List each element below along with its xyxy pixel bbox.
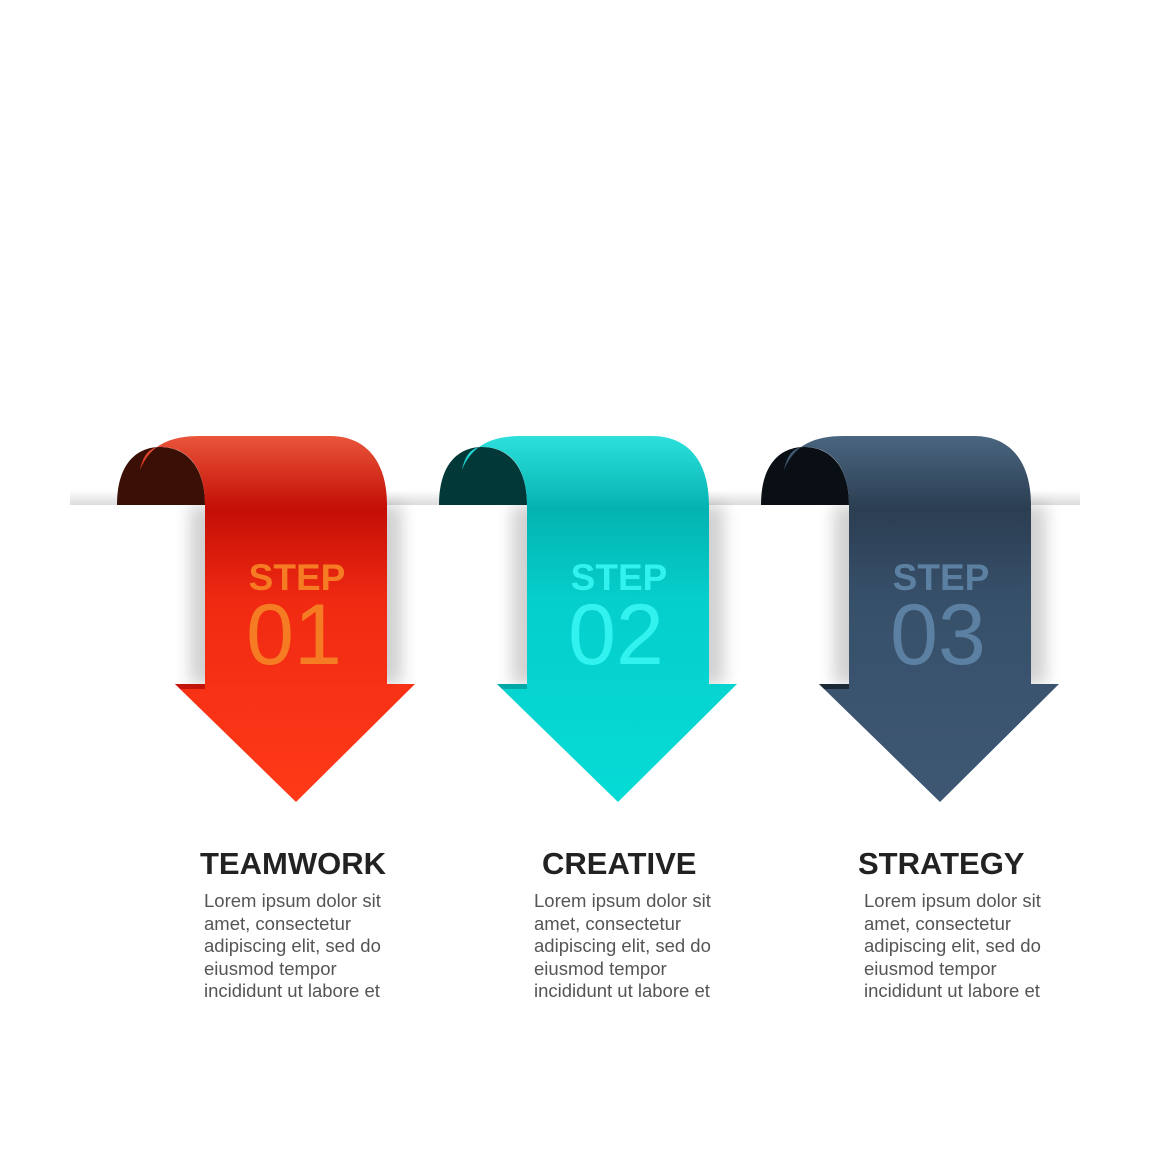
arrow 1: 01 xyxy=(246,587,342,683)
title: strategy: STRATEGY xyxy=(858,846,1024,881)
title: teamwork: TEAMWORK xyxy=(200,846,386,881)
arrow 3 xyxy=(761,436,1059,802)
arrow 3: 03 xyxy=(890,587,986,683)
arrow 2 xyxy=(439,436,737,802)
arrow 1 xyxy=(117,436,415,802)
arrow 2: 02 xyxy=(568,587,664,683)
title: creative: CREATIVE xyxy=(542,846,696,881)
text: creative: Lorem ipsum dolor sit amet, consectetur adipiscing elit, sed do eiusmod tempor incididunt ut labore et xyxy=(534,890,711,1001)
arrow 2: STEP xyxy=(571,557,667,598)
text: teamwork: Lorem ipsum dolor sit amet, consectetur adipiscing elit, sed do eiusmod tempor incididunt ut labore et xyxy=(204,890,381,1001)
text: strategy: Lorem ipsum dolor sit amet, consectetur adipiscing elit, sed do eiusmod tempor incididunt ut labore et xyxy=(864,890,1041,1001)
arrow 1: STEP xyxy=(249,557,345,598)
arrow 3: STEP xyxy=(893,557,989,598)
